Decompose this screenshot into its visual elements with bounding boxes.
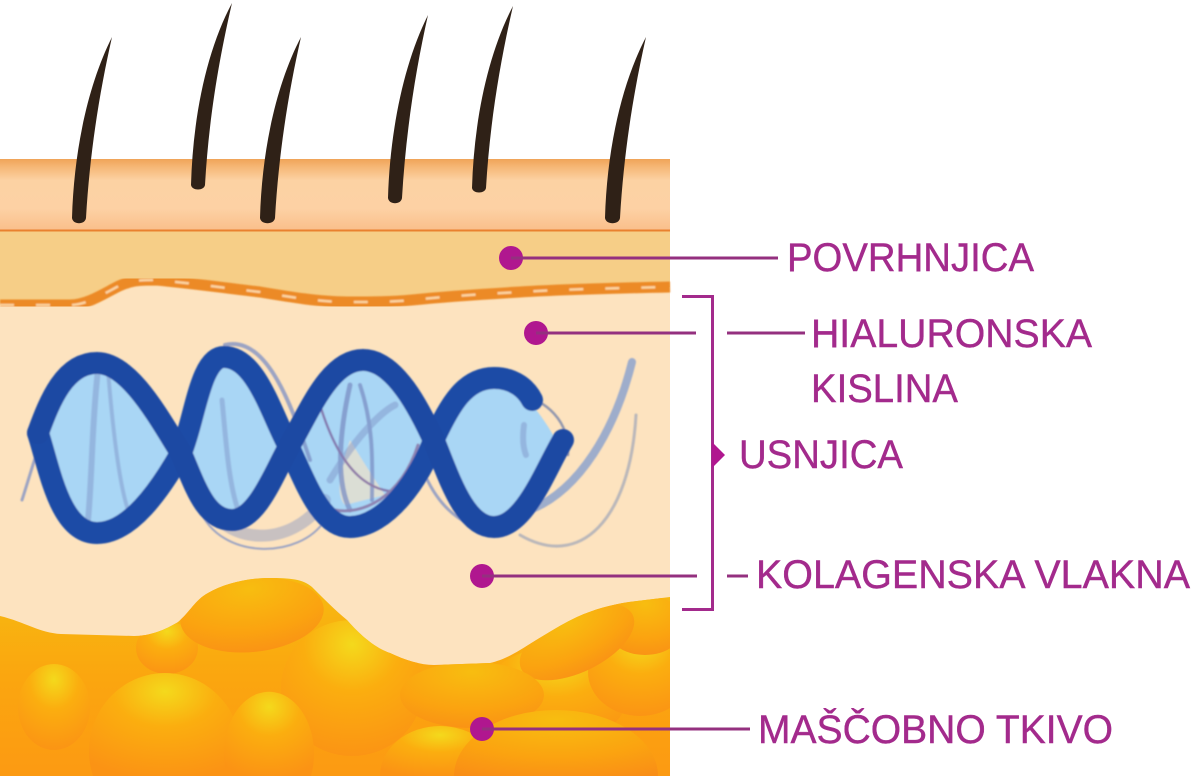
epidermis lower layer (0, 231, 670, 305)
callout: hialuronska kislina: HIALURONSKA (811, 312, 1092, 356)
collagen fibre helix (22, 344, 636, 549)
dermis layer (0, 280, 670, 690)
fat tissue (0, 571, 692, 776)
background fibres (22, 344, 636, 549)
surface line (0, 230, 670, 232)
epidermis surface layer (0, 159, 670, 230)
callout: hialuronska kislina: KISLINA (811, 367, 958, 411)
callout: hialuronska kislina (524, 312, 1092, 411)
callout: povrhnjica (499, 236, 1034, 280)
strand B (38, 360, 563, 527)
hair 1 (72, 37, 112, 223)
callout: maščobno tkivo: MAŠČOBNO TKIVO (758, 707, 1113, 752)
callout: maščobno tkivo (470, 707, 1113, 752)
hairs (72, 3, 646, 223)
helix lobes (38, 360, 556, 533)
callout: kolagenska vlakna (470, 553, 1190, 597)
callout: povrhnjica: POVRHNJICA (787, 236, 1034, 280)
strand A (38, 357, 532, 533)
bracket: usnjica (682, 296, 903, 610)
cream gap in third lobe (340, 440, 385, 505)
hair 5 (472, 6, 513, 192)
hair 6 (605, 37, 646, 223)
basement membrane (0, 280, 670, 305)
callout: kolagenska vlakna: KOLAGENSKA VLAKNA (756, 553, 1190, 597)
hair 4 (388, 15, 428, 203)
hair 3 (260, 37, 301, 223)
hair 2 (191, 3, 232, 190)
panel: skin cross-section (0, 159, 692, 776)
bracket: usnjica: USNJICA (739, 433, 903, 477)
